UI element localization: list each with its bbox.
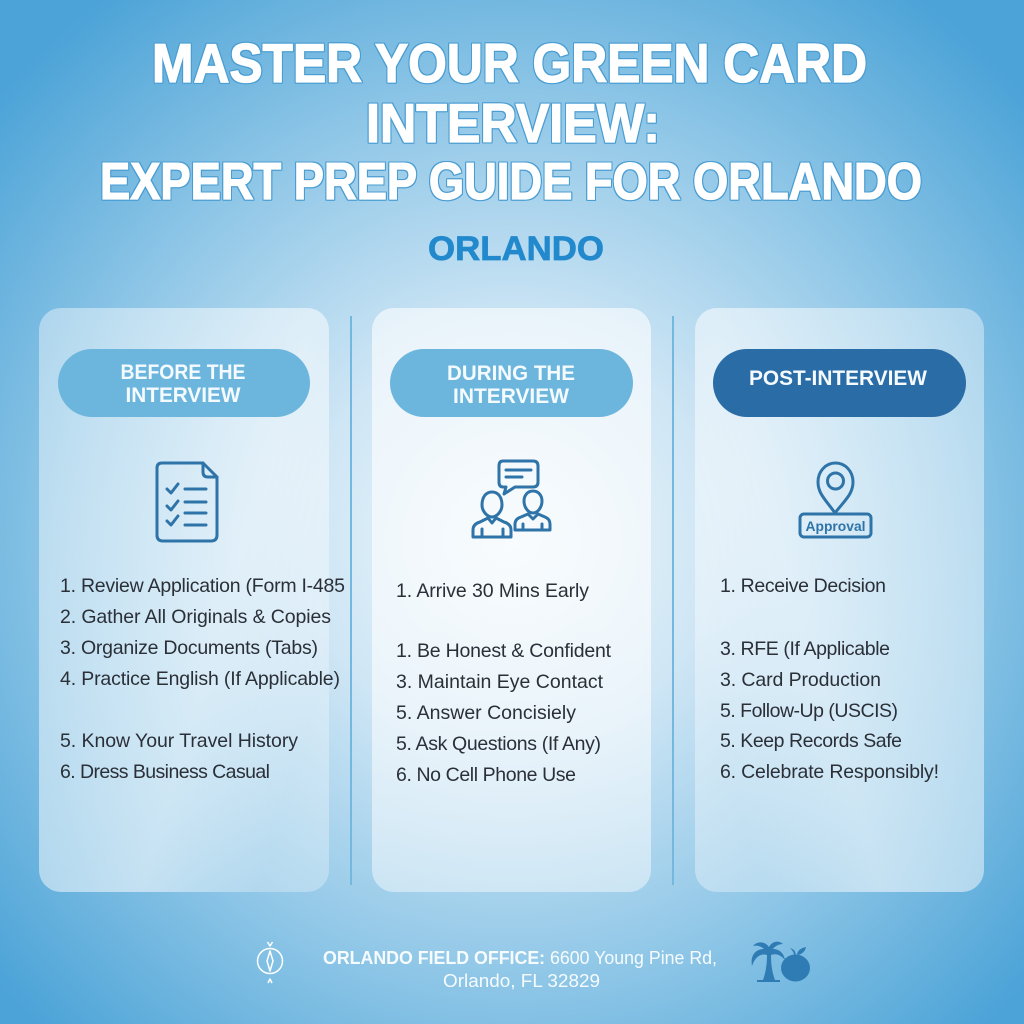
card background	[39, 308, 329, 892]
icon: palm tree and orange	[752, 942, 810, 982]
title	[100, 32, 922, 211]
footer address: Orlando, FL 32829	[443, 970, 600, 991]
pill heading: before the interview: INTERVIEW	[126, 384, 241, 407]
list: before the interview: 1. Review Application (Form I-485	[60, 575, 345, 597]
list: before the interview: 6. Dress Business Casual	[60, 761, 270, 783]
card background	[695, 308, 984, 892]
pill heading: before the interview: BEFORE THE	[120, 361, 246, 384]
list: during the interview: 1. Arrive 30 Mins Early	[396, 580, 589, 602]
pill heading: during the interview: INTERVIEW	[453, 385, 569, 408]
pill heading: post-interview	[713, 349, 966, 417]
icon: location pin with approval stamp: Approval	[806, 518, 866, 534]
panel: during the interview	[372, 308, 651, 892]
icon: location pin with approval stamp	[800, 463, 871, 537]
title: EXPERT PREP GUIDE FOR ORLANDO	[100, 153, 922, 211]
title: INTERVIEW:	[366, 92, 660, 154]
list: before the interview: 2. Gather All Originals & Copies	[60, 606, 331, 628]
pill heading: during the interview: DURING THE	[447, 362, 575, 385]
footer address	[323, 947, 717, 991]
pill heading: during the interview	[390, 349, 633, 417]
title: MASTER YOUR GREEN CARD	[152, 32, 867, 94]
list: before the interview: 4. Practice English (If Applicable)	[60, 668, 340, 690]
divider lines	[351, 316, 673, 885]
list: during the interview	[396, 580, 612, 786]
icon: two people talking	[473, 461, 550, 537]
list: before the interview: 5. Know Your Travel History	[60, 730, 298, 752]
list: post-interview: 5. Follow-Up (USCIS)	[720, 700, 898, 722]
list: post-interview: 3. Card Production	[720, 669, 881, 691]
list: during the interview: 3. Maintain Eye Contact	[396, 671, 604, 693]
pill heading: post-interview: POST-INTERVIEW	[749, 367, 927, 390]
list: post-interview	[720, 575, 939, 783]
panel: before the interview	[39, 308, 345, 892]
list: during the interview: 1. Be Honest & Confident	[396, 640, 612, 662]
list: post-interview: 6. Celebrate Responsibly!	[720, 761, 939, 783]
card background	[372, 308, 651, 892]
list: post-interview: 1. Receive Decision	[720, 575, 886, 597]
icon: compass	[258, 942, 282, 983]
list: during the interview: 6. No Cell Phone Use	[396, 764, 576, 786]
panel: post-interview	[695, 308, 984, 892]
subtitle: Orlando: ORLANDO	[428, 230, 604, 268]
icon: checklist document	[157, 463, 217, 541]
pill heading: before the interview	[58, 349, 310, 417]
list: before the interview: 3. Organize Documents (Tabs)	[60, 637, 318, 659]
list: post-interview: 5. Keep Records Safe	[720, 730, 902, 752]
footer address: ORLANDO FIELD OFFICE: 6600 Young Pine Rd,	[323, 947, 717, 968]
list: during the interview: 5. Ask Questions (If Any)	[396, 733, 601, 755]
list: during the interview: 5. Answer Concisiely	[396, 702, 576, 724]
list: before the interview	[60, 575, 345, 783]
list: post-interview: 3. RFE (If Applicable	[720, 638, 890, 660]
